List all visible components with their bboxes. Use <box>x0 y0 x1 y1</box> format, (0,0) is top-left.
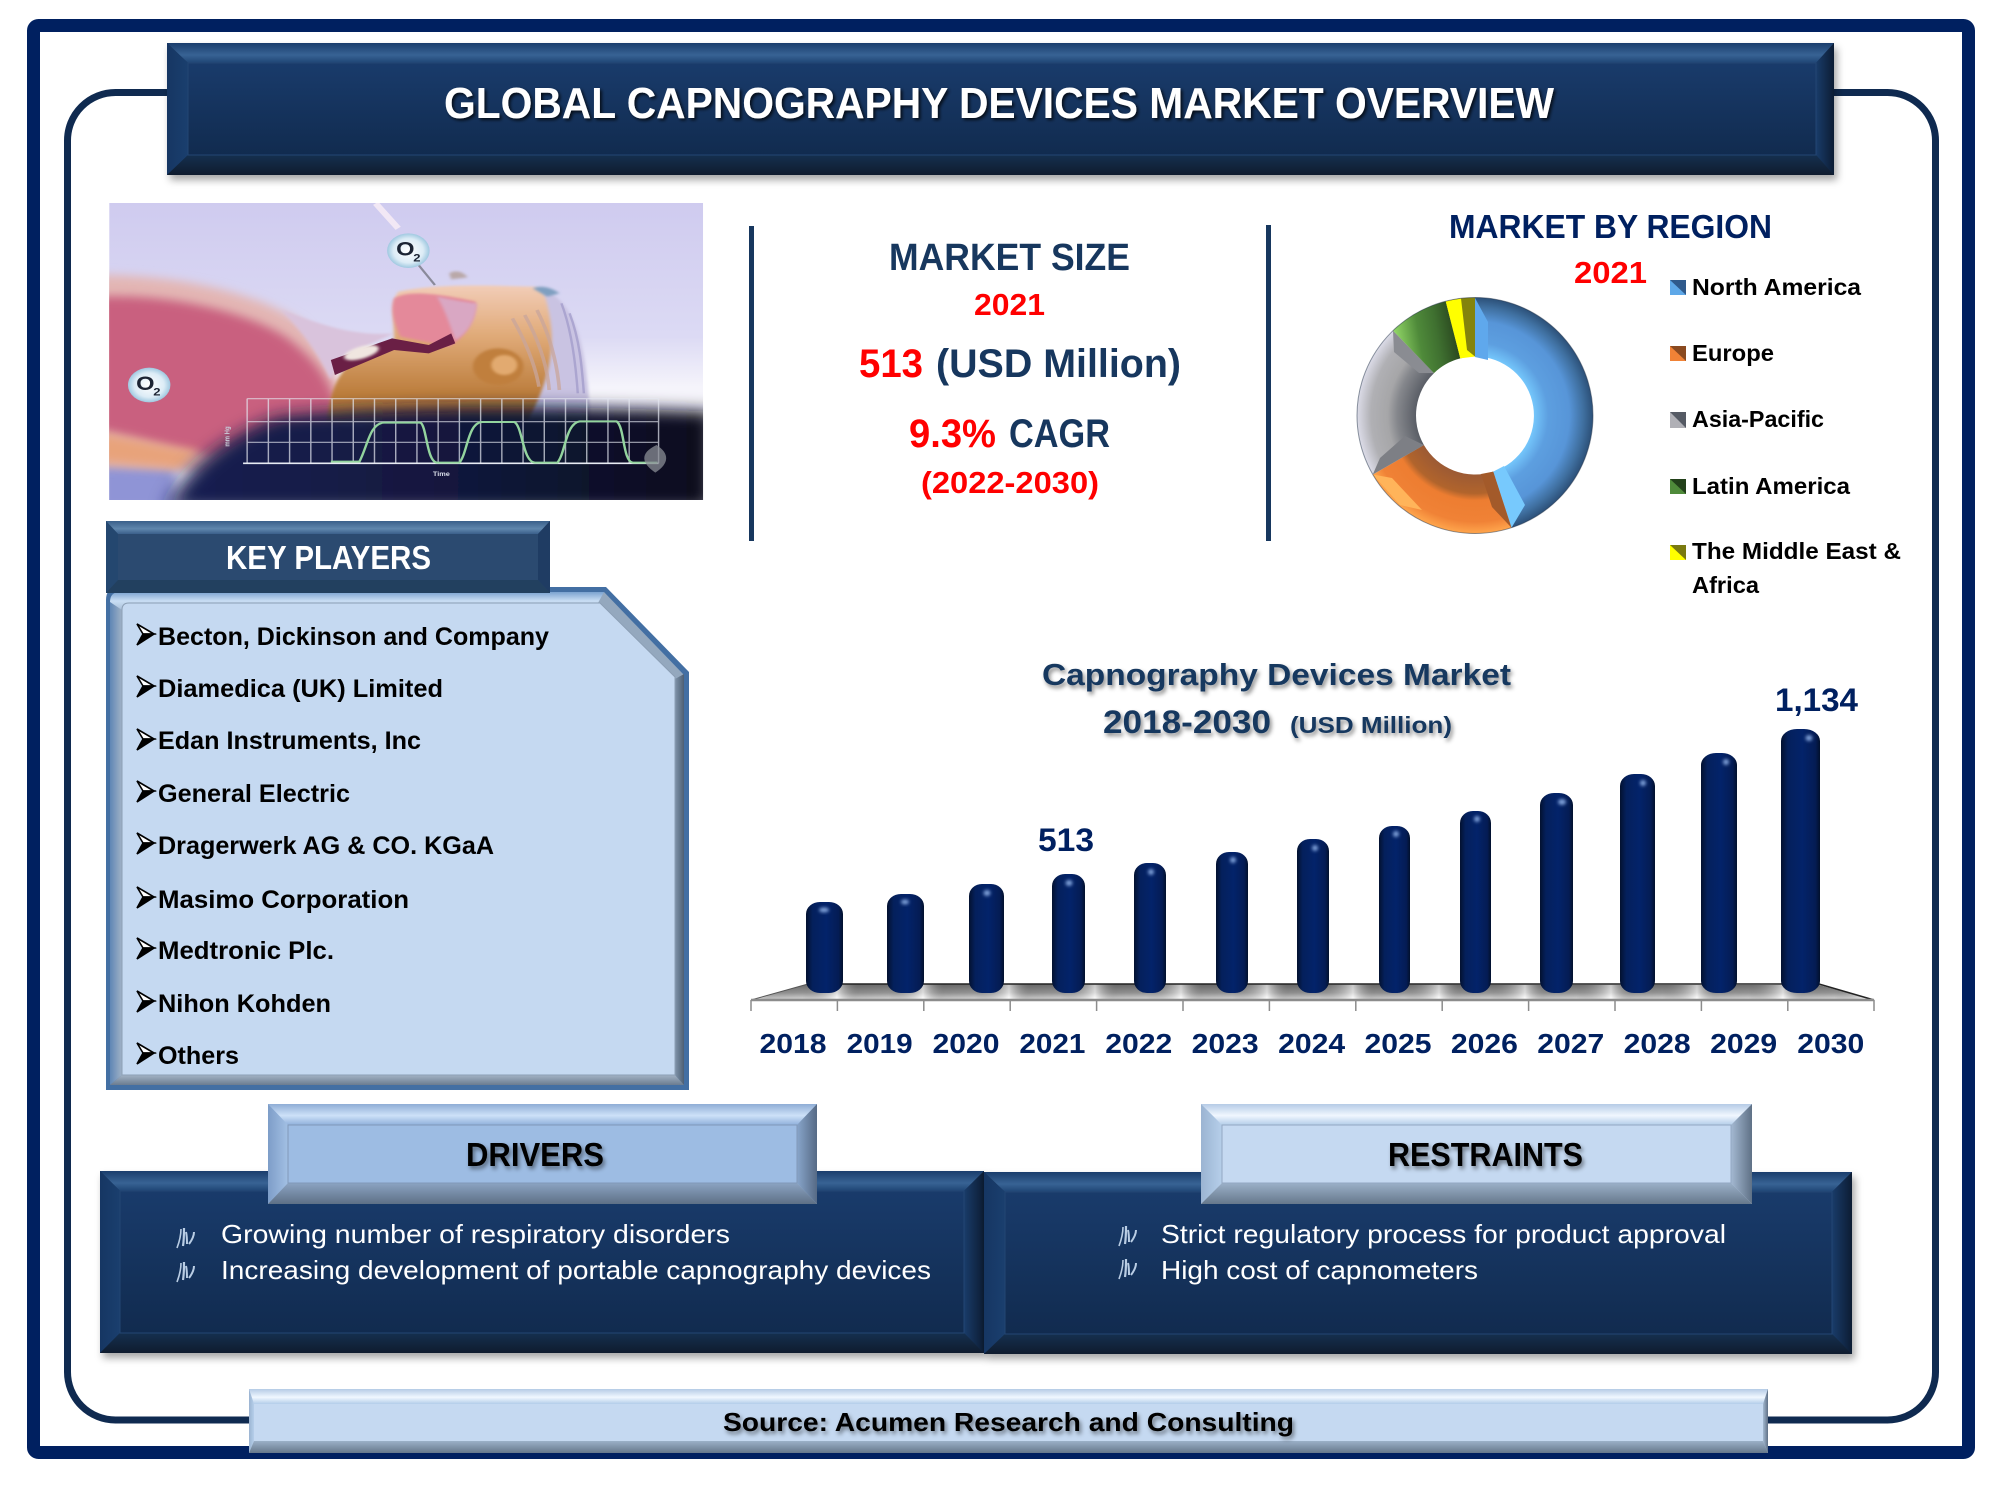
year axis labels: 2030 <box>1797 1028 1864 1059</box>
value: CAGR percent: 9.3% <box>909 412 996 456</box>
unit: (USD Million) <box>936 342 1181 386</box>
list item: Dragerwerk AG & CO. KGaA <box>158 832 494 860</box>
year axis labels: 2024 <box>1278 1028 1346 1059</box>
legend item: Asia-Pacific: Asia-Pacific <box>1692 406 1824 432</box>
bar 2027 <box>1540 793 1573 993</box>
legend item: Middle East and Africa <box>1670 538 1901 598</box>
bar 2026 <box>1460 811 1491 993</box>
bar 2025 <box>1379 826 1410 993</box>
restraint text: Strict regulatory process for product approval <box>1161 1219 1726 1249</box>
list item: Others <box>158 1042 239 1070</box>
year axis labels: 2027 <box>1537 1028 1604 1059</box>
list item: Nihon Kohden <box>158 990 331 1018</box>
chart title year range: 2018-2030 <box>1103 704 1271 740</box>
year axis labels: 2021 <box>1019 1028 1085 1059</box>
bullet icon <box>177 1262 194 1282</box>
oxygen bubble: airway: O <box>396 238 415 260</box>
year axis labels: 2020 <box>932 1028 1000 1059</box>
heading: key players <box>106 521 550 593</box>
bullet icon <box>1119 1259 1136 1279</box>
heading: market size: MARKET SIZE <box>889 237 1130 279</box>
label: CAGR: CAGR <box>1009 412 1110 456</box>
heading: drivers: DRIVERS <box>466 1136 604 1173</box>
data label 2030: 1,134 <box>1775 682 1858 718</box>
divider left <box>749 226 754 541</box>
list item: General Electric <box>158 780 350 808</box>
list item: Medtronic Plc. <box>158 937 334 965</box>
list item: Masimo Corporation <box>158 886 409 914</box>
bar 2022 <box>1134 863 1166 993</box>
panel: key players list <box>106 587 689 1090</box>
panel: restraints <box>984 1172 1852 1354</box>
oxygen bubble: lungs: 2 <box>153 386 161 398</box>
list item: Edan Instruments, Inc <box>158 727 421 755</box>
oxygen bubble: airway <box>387 233 430 268</box>
title banner <box>167 43 1834 175</box>
source text: Source: Acumen Research and Consulting <box>723 1407 1294 1437</box>
year: 2021 <box>974 287 1045 322</box>
axis label: mm Hg: mm Hg <box>224 426 232 447</box>
heading: drivers <box>268 1104 817 1204</box>
legend item: Middle East and Africa: Africa <box>1692 572 1760 598</box>
legend <box>1670 274 1901 598</box>
heading: market by region: MARKET BY REGION <box>1449 208 1772 245</box>
chart title unit: (USD Million) <box>1290 712 1452 738</box>
title text: GLOBAL CAPNOGRAPHY DEVICES MARKET OVERVIEW <box>444 79 1554 128</box>
legend item: Latin America: Latin America <box>1692 473 1851 499</box>
capnography waveform grid <box>243 399 659 463</box>
divider right <box>1266 225 1271 541</box>
axis label: Time: Time <box>433 472 450 478</box>
watermark heart icon <box>644 445 666 473</box>
bar 2023 <box>1216 852 1248 993</box>
bar 2029 <box>1701 753 1737 993</box>
bullet icon <box>177 1228 194 1248</box>
chart title line 1: Capnography Devices Market <box>1042 657 1511 692</box>
bar 2019 <box>887 894 924 993</box>
heading: key players: KEY PLAYERS <box>226 539 431 576</box>
panel: drivers <box>100 1171 984 1353</box>
panel: market size <box>859 237 1181 500</box>
heading: restraints: RESTRAINTS <box>1388 1136 1583 1173</box>
value: 513: 513 <box>859 342 923 386</box>
bar 2020 <box>969 884 1004 993</box>
year axis labels: 2028 <box>1624 1028 1691 1059</box>
bar 2018 <box>806 902 843 993</box>
panel: market by region <box>1357 208 1901 598</box>
year axis labels: 2029 <box>1710 1028 1777 1059</box>
oxygen bubble: lungs: O <box>136 372 155 394</box>
oxygen bubble: lungs <box>128 368 170 402</box>
bar 2028 <box>1620 774 1655 993</box>
year: 2021 <box>1574 255 1647 290</box>
bullet icon <box>1119 1226 1136 1246</box>
restraint text: High cost of capnometers <box>1161 1255 1478 1285</box>
year axis labels: 2025 <box>1364 1028 1432 1059</box>
oxygen bubble: airway: 2 <box>413 251 421 264</box>
year axis labels: 2022 <box>1105 1028 1172 1059</box>
chart floor <box>751 984 1874 1011</box>
list item: Diamedica (UK) Limited <box>158 675 443 703</box>
legend item: North America: North America <box>1692 274 1862 300</box>
year axis labels: 2019 <box>847 1028 913 1059</box>
year axis labels: 2023 <box>1192 1028 1259 1059</box>
bar 2024 <box>1297 839 1329 993</box>
year axis labels: 2026 <box>1451 1028 1518 1059</box>
year axis labels: 2018 <box>760 1028 826 1059</box>
forecast period: (2022-2030) <box>921 465 1099 500</box>
driver text: Increasing development of portable capnography devices <box>221 1255 931 1285</box>
heading: restraints <box>1201 1104 1752 1204</box>
chart: market growth 2018-2030 <box>751 657 1874 1059</box>
data label 2021: 513 <box>1038 822 1094 858</box>
list item: Becton, Dickinson and Company <box>158 623 549 651</box>
legend item: Middle East and Africa: The Middle East & <box>1692 538 1901 564</box>
bar 2021 <box>1052 874 1085 993</box>
donut chart <box>1357 298 1593 534</box>
driver text: Growing number of respiratory disorders <box>221 1219 730 1249</box>
source bar <box>249 1389 1768 1453</box>
bar 2030 <box>1781 729 1820 993</box>
illustration: capnography patient photo <box>98 203 714 510</box>
year axis labels <box>760 1028 1864 1059</box>
legend item: Europe: Europe <box>1692 340 1774 366</box>
